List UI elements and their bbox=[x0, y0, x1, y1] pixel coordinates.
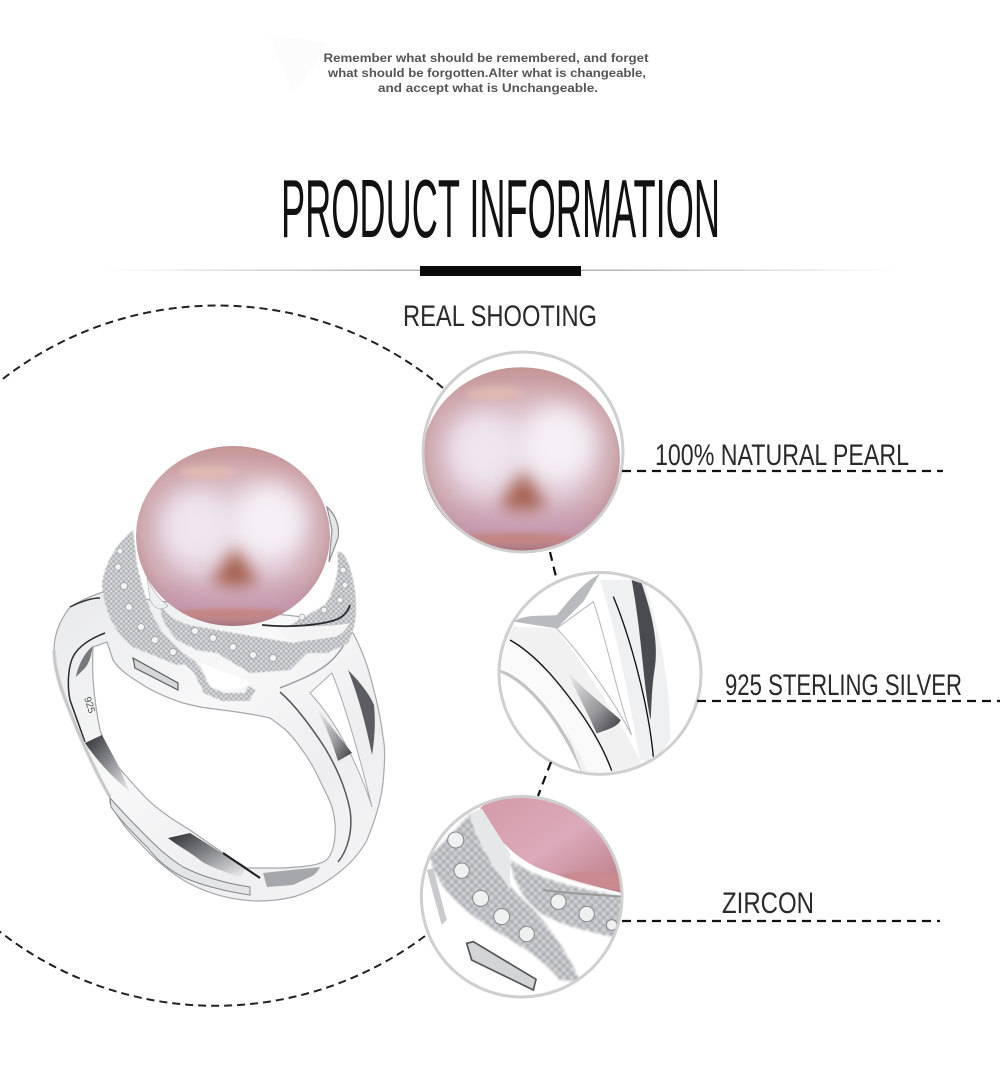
strand side bbox=[500, 638, 612, 777]
ring band bbox=[54, 592, 385, 901]
label: zircon: ZIRCON bbox=[722, 887, 814, 920]
split shank bbox=[280, 634, 375, 862]
slot bbox=[467, 942, 536, 990]
main ring illustration bbox=[54, 446, 385, 901]
detail circle: silver bbox=[497, 570, 703, 777]
window bbox=[557, 602, 632, 735]
dark reflection bbox=[570, 675, 621, 734]
right strand dark bbox=[632, 580, 656, 720]
connector dashes bbox=[538, 471, 1000, 921]
faint watermark behind tagline bbox=[270, 38, 330, 92]
lower band edge bbox=[500, 670, 582, 771]
leaf dark edge bbox=[262, 605, 350, 626]
tagline text: and accept what is Unchangeable. bbox=[378, 81, 598, 95]
detail circle: zircon bbox=[420, 793, 627, 1000]
shank strand left bbox=[505, 627, 642, 777]
large dashed circle bbox=[0, 306, 443, 1006]
silver highlight bbox=[470, 808, 510, 890]
tagline text bbox=[324, 51, 648, 95]
pearl bbox=[136, 446, 330, 626]
pave setting bbox=[102, 530, 356, 697]
hallmark 925: 925 bbox=[81, 696, 97, 715]
right strand bbox=[600, 580, 670, 763]
pearl crop bbox=[480, 798, 623, 893]
prong behind pearl bbox=[327, 507, 339, 562]
zircons bbox=[448, 832, 617, 942]
adjustable band end bbox=[110, 798, 320, 895]
side slot bbox=[133, 658, 178, 690]
title divider bbox=[100, 266, 900, 276]
tagline text: Remember what should be remembered, and forget bbox=[324, 51, 648, 65]
pearl flecks bbox=[560, 872, 622, 891]
silver leaf under pearl bbox=[275, 623, 350, 641]
left arm reflections bbox=[54, 598, 130, 797]
label: natural pearl: 100% NATURAL PEARL bbox=[655, 439, 909, 472]
top bridge bbox=[513, 573, 600, 628]
black edge lines bbox=[510, 597, 653, 771]
subtitle: real shooting: REAL SHOOTING bbox=[403, 300, 597, 333]
tagline text: what should be forgotten.Alter what is changeable, bbox=[327, 66, 646, 80]
lattice window bbox=[200, 663, 250, 690]
side inscription band bbox=[427, 868, 447, 925]
pave strips bbox=[430, 813, 623, 982]
pearl seat bbox=[147, 577, 168, 609]
zircon stones bbox=[115, 548, 348, 662]
detail circle: pearl bbox=[422, 352, 623, 552]
